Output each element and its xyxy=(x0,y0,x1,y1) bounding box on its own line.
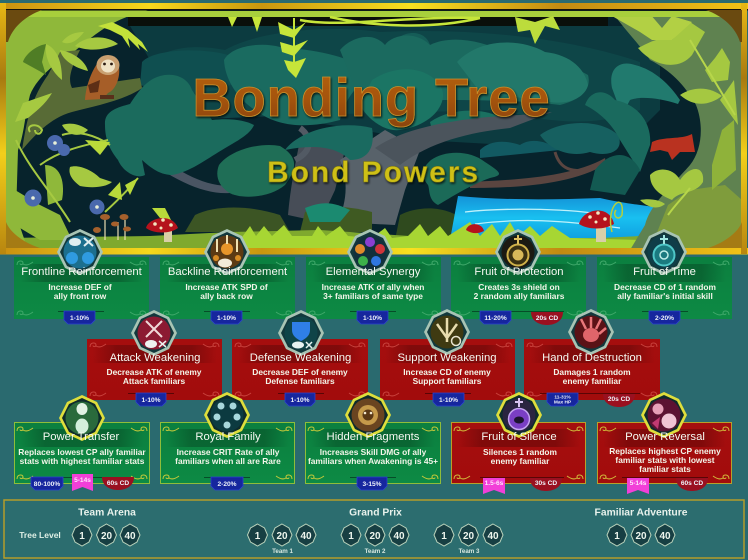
panel: Royal Family: Royal Family xyxy=(195,431,261,443)
level badges: Team Arena: 1 xyxy=(79,531,85,542)
panel: Elemental Synergy: Elemental Synergy xyxy=(326,266,421,278)
panel: Hidden Fragments: familiars when Awakening is 45+ xyxy=(308,456,438,466)
panel: Power Reversal: Replaces highest CP enemy xyxy=(609,446,721,456)
panel: Fruit of Protection: 11-20% xyxy=(484,315,507,322)
panel: Hidden Fragments: 3-15% xyxy=(362,481,382,488)
panel: Royal Family: familiars when all are Rare xyxy=(175,456,281,466)
ground grass xyxy=(5,230,745,250)
panel: Fruit of Protection: 2 random ally familiars xyxy=(474,291,565,301)
panel: Royal Family: 2-20% xyxy=(217,481,237,488)
panel: Backline Reinforcement: ally back row xyxy=(200,291,253,301)
icon: Fruit of Silence xyxy=(496,392,542,438)
icon: Defense Weakening xyxy=(278,310,324,356)
tree trunks and branches xyxy=(136,112,606,225)
background foliage layer xyxy=(130,26,660,150)
panel: Hidden Fragments xyxy=(306,392,440,490)
icon: Frontline Reinforcement xyxy=(57,229,103,275)
level badges: Familiar Adventure: 40 xyxy=(659,531,671,542)
level badges: Grand Prix Team 3: 20 xyxy=(463,531,474,542)
panel: Royal Family: Increase CRIT Rate of ally xyxy=(177,447,280,457)
panel: Fruit of Time: Decrease CD of 1 random xyxy=(614,282,716,292)
level badges: Grand Prix Team 2: 1 xyxy=(348,531,354,542)
panel: Fruit of Protection: 20s CD xyxy=(536,315,558,322)
panel: Fruit of Time: ally familiar's initial skill xyxy=(617,291,713,301)
panel: Fruit of Protection xyxy=(451,229,586,325)
back canopy layer xyxy=(224,45,368,125)
icon: Power Transfer xyxy=(59,395,105,441)
level badges: Grand Prix Team 2: 40 xyxy=(393,531,405,542)
left plant stems xyxy=(16,125,138,222)
panel: Support Weakening: Increase CD of enemy xyxy=(403,367,491,377)
panel: Power Reversal: familiar stats xyxy=(639,464,691,474)
frame: left foliage xyxy=(6,10,150,250)
panel: Fruit of Silence xyxy=(452,392,586,494)
panel: Attack Weakening: Attack Weakening xyxy=(110,352,200,364)
heading: Grand Prix: Grand Prix xyxy=(349,508,402,518)
panel: Power Transfer: 5-14s xyxy=(74,477,91,484)
panel: Power Reversal xyxy=(598,392,732,494)
panel: Frontline Reinforcement xyxy=(14,229,149,324)
panel: Attack Weakening: Decrease ATK of enemy xyxy=(107,367,202,377)
panel: Backline Reinforcement: Increase ATK SPD of xyxy=(185,282,268,292)
panel: Attack Weakening: 1-10% xyxy=(141,397,161,404)
panel: Hand of Destruction: Hand of Destruction xyxy=(542,352,642,364)
panel: Fruit of Silence: 1.5-6s xyxy=(485,480,504,487)
level badges: Grand Prix Team 3: 40 xyxy=(487,531,499,542)
subtitle: Bond Powers: Bond Powers xyxy=(267,156,478,189)
panel: Power Transfer: 60s CD xyxy=(107,480,129,487)
level badges: Team Arena xyxy=(72,524,140,546)
gold frame xyxy=(0,3,748,254)
panel: Fruit of Time: 2-20% xyxy=(655,315,674,322)
level badges: Team Arena: 40 xyxy=(124,531,136,542)
level badges: Grand Prix Team 2: Team 2 xyxy=(365,548,386,555)
panel: Fruit of Silence: Silences 1 random xyxy=(483,447,557,457)
icon: Fruit of Protection xyxy=(495,229,541,275)
panel: Hand of Destruction: Max HP xyxy=(554,400,572,406)
top lime strip and hanging vines xyxy=(6,11,742,78)
panel: Support Weakening xyxy=(380,309,515,406)
panel: Fruit of Silence: enemy familiar xyxy=(491,456,550,466)
panel: Elemental Synergy xyxy=(306,229,441,324)
level badges: Familiar Adventure: 20 xyxy=(635,531,647,542)
panel: Frontline Reinforcement: 1-10% xyxy=(70,315,89,322)
icon: Elemental Synergy xyxy=(347,229,393,275)
right leaves xyxy=(612,14,738,207)
panel: Defense Weakening: Defense Weakening xyxy=(250,352,351,364)
panel: Power Transfer: 80-100% xyxy=(34,481,60,488)
panel: Royal Family xyxy=(160,392,294,490)
level badges: Grand Prix Team 3 xyxy=(434,524,503,555)
panel: Fruit of Silence: Fruit of Silence xyxy=(481,431,557,443)
level badges: Grand Prix Team 1: 20 xyxy=(276,531,288,542)
panel: Fruit of Silence: 30s CD xyxy=(535,480,557,487)
level badges: Grand Prix Team 3: Team 3 xyxy=(459,548,480,555)
panel: Backline Reinforcement: 1-10% xyxy=(217,315,236,322)
icon: Hidden Fragments xyxy=(345,392,391,438)
panel: Hand of Destruction: Damages 1 random xyxy=(553,367,631,377)
panel: Power Transfer xyxy=(14,395,150,491)
panel: Support Weakening: Support Weakening xyxy=(397,352,497,364)
panel: Defense Weakening xyxy=(232,310,368,406)
water xyxy=(450,196,680,240)
panel: Support Weakening: Support familiars xyxy=(413,376,482,386)
panel: Hand of Destruction: enemy familiar xyxy=(563,376,622,386)
icon: Fruit of Time xyxy=(641,229,687,275)
level badges: Grand Prix Team 1 xyxy=(248,524,316,555)
label: Tree Level: Tree Level xyxy=(19,530,61,540)
panel: Defense Weakening: Decrease DEF of enemy xyxy=(252,367,348,377)
panel: Attack Weakening xyxy=(87,310,222,406)
left leaves xyxy=(15,22,148,240)
title: Bonding Tree: Bonding Tree xyxy=(192,68,550,128)
panel: Frontline Reinforcement: Frontline Reinforcement xyxy=(21,266,143,278)
panel: Hand of Destruction: 11-31% xyxy=(554,394,571,400)
panel: Hidden Fragments: Increases Skill DMG of ally xyxy=(320,447,427,457)
panel: Elemental Synergy: Increase ATK of ally when xyxy=(322,282,424,292)
panel: Fruit of Protection: Fruit of Protection xyxy=(474,266,564,278)
panel: Fruit of Time xyxy=(597,229,732,324)
mid ground xyxy=(300,207,372,232)
panel: Elemental Synergy: 3+ familiars of same type xyxy=(323,291,423,301)
icon: brown mushrooms xyxy=(93,214,131,240)
panel: Power Reversal: 5-14s xyxy=(630,480,647,487)
icon: red mushrooms xyxy=(146,210,614,242)
panel: Power Transfer: stats with highest familiar stats xyxy=(20,456,145,466)
panel: Backline Reinforcement: Backline Reinforcement xyxy=(168,266,288,278)
panel: Backline Reinforcement xyxy=(160,229,295,324)
level badges: Grand Prix Team 2: 20 xyxy=(369,531,381,542)
heading: Team Arena: Team Arena xyxy=(78,508,136,518)
panel: Fruit of Protection: Creates 3s shield on xyxy=(478,282,560,292)
panel: Attack Weakening: Attack familiars xyxy=(123,376,186,386)
icon: Hand of Destruction xyxy=(568,309,614,355)
level badges: Grand Prix Team 1: 40 xyxy=(300,531,312,542)
panel: Power Transfer: Replaces lowest CP ally familiar xyxy=(18,447,146,457)
icon: owl xyxy=(85,55,120,100)
panel: Hidden Fragments: Hidden Fragments xyxy=(327,431,420,443)
banner illustration xyxy=(0,3,748,254)
panel: Fruit of Time: Fruit of Time xyxy=(633,266,696,278)
frame: left branch xyxy=(22,50,142,150)
heading: Familiar Adventure: Familiar Adventure xyxy=(595,508,688,518)
panel: Hand of Destruction xyxy=(524,309,660,407)
panel: Frontline Reinforcement: ally front row xyxy=(54,291,107,301)
panel: Defense Weakening: 1-10% xyxy=(290,397,310,404)
fox xyxy=(650,134,695,160)
panel: Hand of Destruction: 20s CD xyxy=(608,396,630,403)
front canopy layer xyxy=(105,75,254,176)
panel: Support Weakening: 1-10% xyxy=(439,397,458,404)
icon: Backline Reinforcement xyxy=(204,229,250,275)
icon: Support Weakening xyxy=(424,309,470,355)
frame: right foliage xyxy=(612,12,742,250)
panel: Power Reversal: Power Reversal xyxy=(625,431,705,443)
panel: mode legend xyxy=(4,500,744,558)
icon: Power Reversal xyxy=(641,392,687,438)
level badges: Grand Prix Team 1: Team 1 xyxy=(272,548,293,555)
level badges: Familiar Adventure xyxy=(607,524,675,546)
level badges: Familiar Adventure: 1 xyxy=(614,531,620,542)
level badges: Grand Prix Team 2 xyxy=(341,524,409,555)
panel: Frontline Reinforcement: Increase DEF of xyxy=(48,282,112,292)
level badges: Team Arena: 20 xyxy=(101,531,112,542)
level badges: Grand Prix Team 1: 1 xyxy=(255,531,261,542)
icon: Attack Weakening xyxy=(131,310,177,356)
panel: Power Reversal: 60s CD xyxy=(681,480,703,487)
panel: Power Transfer: Power Transfer xyxy=(43,431,120,443)
level badges: Grand Prix Team 3: 1 xyxy=(441,531,447,542)
panel: Power Reversal: familiar stats with lowest xyxy=(615,455,715,465)
icon: Royal Family xyxy=(204,392,250,438)
panel: Elemental Synergy: 1-10% xyxy=(363,315,382,322)
panel: Defense Weakening: Defense familiars xyxy=(265,376,335,386)
icon: blue flowers xyxy=(24,135,719,223)
